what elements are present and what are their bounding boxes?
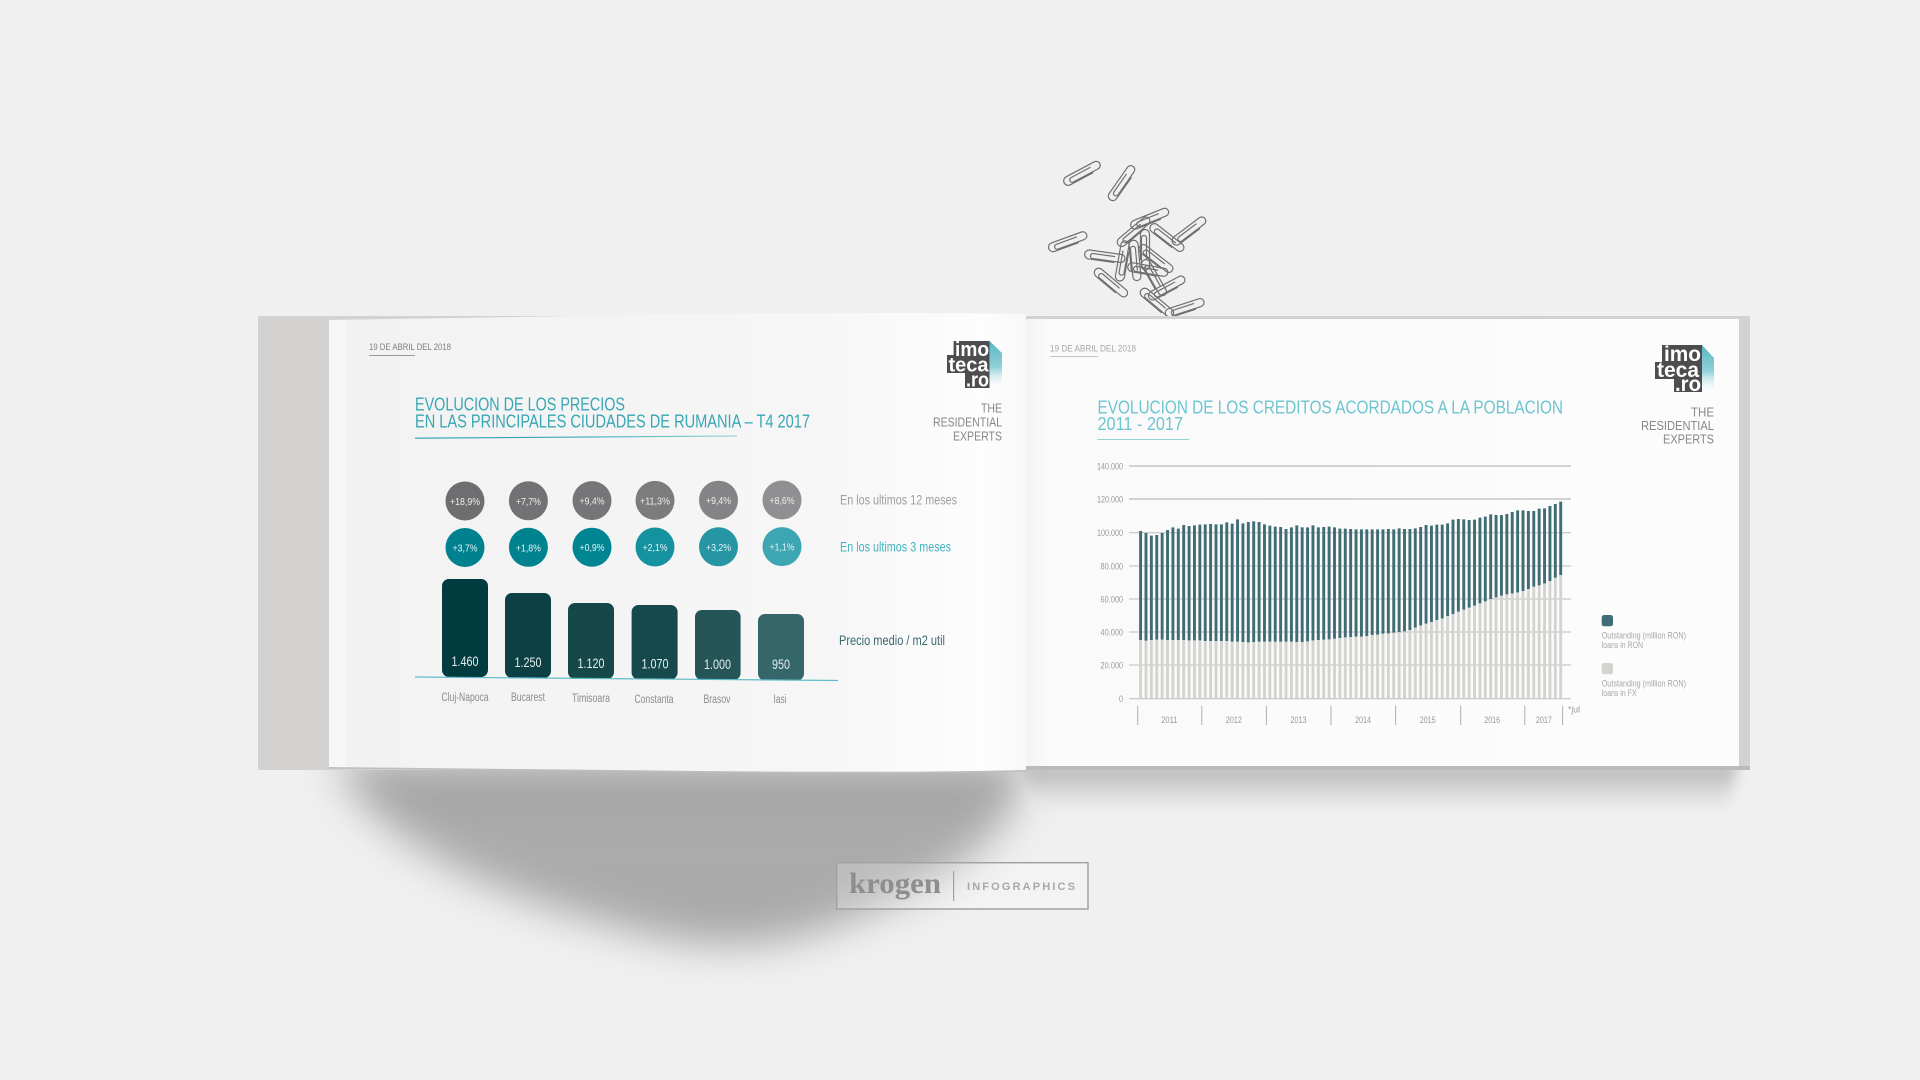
- bar chart: average price per m2: [415, 579, 838, 680]
- circles: last 3 months: +0,9%: [580, 542, 604, 554]
- right page tagline: EXPERTS: [1663, 432, 1714, 446]
- left page tagline: EXPERTS: [953, 428, 1002, 444]
- left page logo: teca: [948, 354, 989, 376]
- chart y axis and gridlines: 100.000: [1097, 528, 1123, 538]
- city labels: Iasi: [774, 694, 786, 706]
- right page drop shadow: [1022, 764, 1738, 808]
- circles: last 3 months: +1,1%: [770, 542, 794, 554]
- bar chart: average price per m2: 1.070: [642, 656, 669, 672]
- chart x axis years: 2015: [1420, 715, 1436, 725]
- circles: last 3 months: [446, 527, 802, 567]
- right page tagline: THE: [1691, 404, 1714, 420]
- left page date: [369, 342, 451, 356]
- left page title: EVOLUCION DE LOS PRECIOS: [415, 394, 625, 414]
- right page tagline: [1641, 404, 1714, 446]
- chart x axis years: *jul: [1568, 704, 1580, 714]
- chart y axis and gridlines: 40.000: [1100, 628, 1123, 638]
- circles: last 3 months: +1,8%: [516, 542, 541, 554]
- left page logo: [947, 339, 1002, 392]
- circles: last 12 months: +9,4%: [706, 495, 731, 507]
- chart legend: Outstanding (million RON): [1602, 631, 1686, 642]
- chart x axis years: 2017: [1536, 715, 1552, 725]
- circles: last 12 months: +9,4%: [580, 496, 604, 508]
- circles: last 3 months: +2,1%: [642, 542, 668, 554]
- city labels: [442, 692, 786, 706]
- left page tagline: RESIDENTIAL: [933, 414, 1002, 430]
- left page tagline: THE: [981, 400, 1002, 416]
- chart y axis and gridlines: 20.000: [1100, 660, 1123, 670]
- row labels: Precio medio / m2 util: [839, 632, 945, 648]
- left page date: 19 DE ABRIL DEL 2018: [369, 342, 451, 353]
- chart legend: [1602, 615, 1686, 699]
- right page logo: .ro: [1675, 373, 1701, 396]
- chart legend: loans in FX: [1602, 688, 1637, 699]
- bar chart: average price per m2: 1.120: [578, 655, 605, 671]
- chart x axis years: 2012: [1226, 715, 1242, 725]
- row labels: En los ultimos 3 meses: [840, 538, 951, 554]
- city labels: Constanta: [634, 694, 674, 706]
- right page logo: imo: [1664, 343, 1701, 366]
- right page date: 19 DE ABRIL DEL 2018: [1050, 344, 1136, 354]
- bar chart: average price per m2: 1.250: [514, 654, 542, 670]
- krogen infographics badge: krogen: [849, 867, 941, 900]
- circles: last 12 months: +18,9%: [450, 496, 480, 508]
- left page title: EN LAS PRINCIPALES CIUDADES DE RUMANIA – T4 2017: [415, 410, 810, 432]
- chart legend: Outstanding (million RON): [1602, 679, 1686, 690]
- chart x axis years: 2014: [1355, 715, 1371, 725]
- left page logo: imo: [955, 339, 989, 361]
- row labels: [839, 492, 957, 648]
- circles: last 12 months: +7,7%: [516, 496, 541, 508]
- circles: last 12 months: +11,3%: [640, 495, 670, 507]
- book cover: [258, 316, 1750, 770]
- chart x axis years: 2016: [1484, 715, 1500, 725]
- row labels: En los ultimos 12 meses: [840, 492, 957, 508]
- right page title: [1098, 398, 1563, 440]
- city labels: Timisoara: [572, 693, 610, 705]
- krogen infographics badge: INFOGRAPHICS: [967, 881, 1075, 893]
- chart x axis years: [1138, 704, 1580, 725]
- chart x axis years: 2013: [1290, 715, 1306, 725]
- right page title: 2011 - 2017: [1098, 414, 1183, 434]
- chart y axis and gridlines: 60.000: [1100, 594, 1123, 604]
- circles: last 12 months: +8,6%: [770, 495, 794, 507]
- chart x axis years: 2011: [1161, 715, 1177, 725]
- krogen infographics badge: [837, 863, 1088, 909]
- panel: left page: [329, 313, 1026, 773]
- left page drop shadow: [335, 760, 1027, 945]
- stacked bar chart: outstanding loans: [1097, 462, 1580, 725]
- city labels: Bucarest: [511, 692, 546, 704]
- chart y axis and gridlines: 80.000: [1100, 562, 1123, 572]
- chart y axis and gridlines: [1097, 462, 1571, 704]
- left page logo: .ro: [966, 370, 989, 392]
- panel: right page: [1026, 319, 1750, 770]
- bars: loans in FX: [1141, 575, 1561, 699]
- bars: loans in RON: [1141, 502, 1561, 642]
- chart y axis and gridlines: 0: [1119, 694, 1123, 704]
- bar chart: average price per m2: 1.460: [452, 653, 479, 669]
- circles: last 12 months: [446, 480, 802, 520]
- right page title: EVOLUCION DE LOS CREDITOS ACORDADOS A LA POBLACION: [1098, 398, 1563, 418]
- circles: last 3 months: +3,7%: [452, 542, 478, 554]
- chart y axis and gridlines: 140.000: [1097, 462, 1123, 472]
- right page tagline: RESIDENTIAL: [1641, 418, 1714, 433]
- city labels: Cluj-Napoca: [442, 692, 489, 704]
- circles: last 3 months: +3,2%: [706, 542, 731, 554]
- chart legend: loans in RON: [1602, 640, 1643, 651]
- paperclips: [1047, 160, 1208, 319]
- bar chart: average price per m2: 1.000: [704, 656, 731, 672]
- right page logo: [1655, 343, 1714, 396]
- chart y axis and gridlines: 120.000: [1097, 494, 1123, 504]
- right page logo: teca: [1657, 359, 1699, 382]
- left page title: [415, 394, 810, 438]
- left page tagline: [933, 400, 1002, 444]
- city labels: Brasov: [704, 694, 731, 706]
- bar chart: average price per m2: 950: [772, 656, 790, 672]
